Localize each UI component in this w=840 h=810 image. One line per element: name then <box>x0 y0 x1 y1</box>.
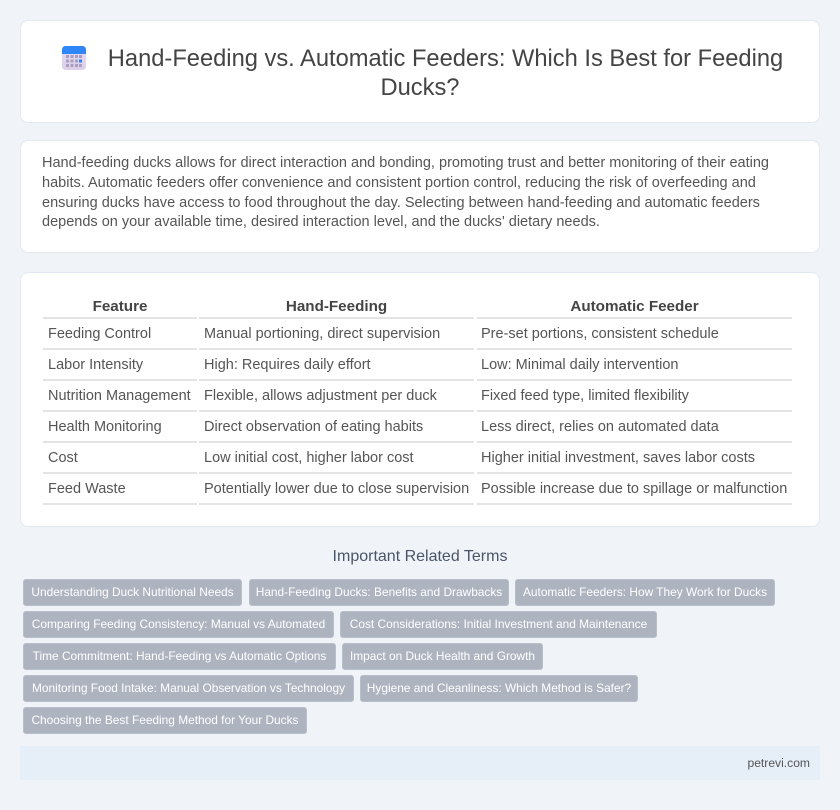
row: feed waste: Feed Waste <box>48 481 126 497</box>
row: feed waste: Possible increase due to spillage or malfunction <box>481 481 787 497</box>
tag: Hygiene and Cleanliness: Which Method is Safer? <box>367 681 631 695</box>
row: cost: Low initial cost, higher labor cost <box>204 450 414 466</box>
row: health monitoring: Less direct, relies on automated data <box>481 419 719 435</box>
tag <box>23 579 242 606</box>
tag <box>23 675 354 702</box>
row: health monitoring <box>48 419 719 435</box>
row: feeding control: Feeding Control <box>48 326 151 342</box>
title <box>108 46 783 101</box>
row: cost: Higher initial investment, saves labor costs <box>481 450 755 466</box>
title: Ducks? <box>380 75 460 101</box>
row: feed waste: Potentially lower due to close supervision <box>204 481 469 497</box>
row: health monitoring: Direct observation of eating habits <box>204 419 423 435</box>
title: Hand-Feeding vs. Automatic Feeders: Which Is Best for Feeding <box>108 46 783 72</box>
tag: Cost Considerations: Initial Investment and Maintenance <box>350 617 647 631</box>
row: feeding control: Manual portioning, direct supervision <box>204 326 440 342</box>
icon: calendar <box>62 46 86 70</box>
row: feed waste <box>48 481 787 497</box>
panel: title header <box>20 20 820 123</box>
row: nutrition management: Fixed feed type, limited flexibility <box>481 388 689 404</box>
tag: Choosing the Best Feeding Method for Your Ducks <box>31 713 299 727</box>
row: cost <box>48 450 755 466</box>
tag <box>360 675 638 702</box>
tag <box>23 707 307 734</box>
tag <box>340 611 657 638</box>
tag <box>249 579 509 606</box>
intro text: habits. Automatic feeders offer convenience and consistent portion control, reducing the risk of overfeeding and <box>42 175 756 191</box>
tag: Understanding Duck Nutritional Needs <box>31 585 234 599</box>
tag: Hand-Feeding Ducks: Benefits and Drawbacks <box>256 585 502 599</box>
tag <box>515 579 775 606</box>
tag <box>342 643 543 670</box>
row: nutrition management: Flexible, allows adjustment per duck <box>204 388 437 404</box>
row: labor intensity: High: Requires daily effort <box>204 357 371 373</box>
intro text: Hand-feeding ducks allows for direct interaction and bonding, promoting trust and better monitoring of their eating <box>42 155 769 171</box>
row: labor intensity <box>48 357 678 373</box>
intro text <box>42 155 769 230</box>
row: health monitoring: Health Monitoring <box>48 419 162 435</box>
row: labor intensity: Labor Intensity <box>48 357 143 373</box>
row: nutrition management <box>48 388 689 404</box>
footer <box>20 746 820 780</box>
comparison table <box>43 298 792 505</box>
row: feeding control <box>48 326 719 342</box>
row: nutrition management: Nutrition Management <box>48 388 191 404</box>
table header: Hand-Feeding <box>286 298 387 315</box>
intro text: depends on your available time, desired interaction level, and the ducks' dietary needs. <box>42 214 600 230</box>
tag <box>23 611 334 638</box>
row: labor intensity: Low: Minimal daily intervention <box>481 357 678 373</box>
intro text: ensuring ducks have access to food throughout the day. Selecting between hand-feeding and automatic feeders <box>42 195 760 211</box>
related term tags <box>23 579 775 734</box>
panel: introduction <box>20 140 820 253</box>
tag: Automatic Feeders: How They Work for Ducks <box>523 585 767 599</box>
tag <box>23 643 336 670</box>
panel: comparison table <box>20 272 820 527</box>
row: feeding control: Pre-set portions, consistent schedule <box>481 326 719 342</box>
footer source text: petrevi.com <box>747 756 810 770</box>
row: cost: Cost <box>48 450 78 466</box>
tag: Impact on Duck Health and Growth <box>350 649 535 663</box>
tag: Time Commitment: Hand-Feeding vs Automatic Options <box>33 649 326 663</box>
heading: important related terms: Important Related Terms <box>333 548 507 565</box>
table header: Feature <box>93 298 147 315</box>
tag: Monitoring Food Intake: Manual Observation vs Technology <box>32 681 345 695</box>
table header: Automatic Feeder <box>570 298 699 315</box>
tag: Comparing Feeding Consistency: Manual vs Automated <box>32 617 325 631</box>
table header <box>93 298 699 315</box>
